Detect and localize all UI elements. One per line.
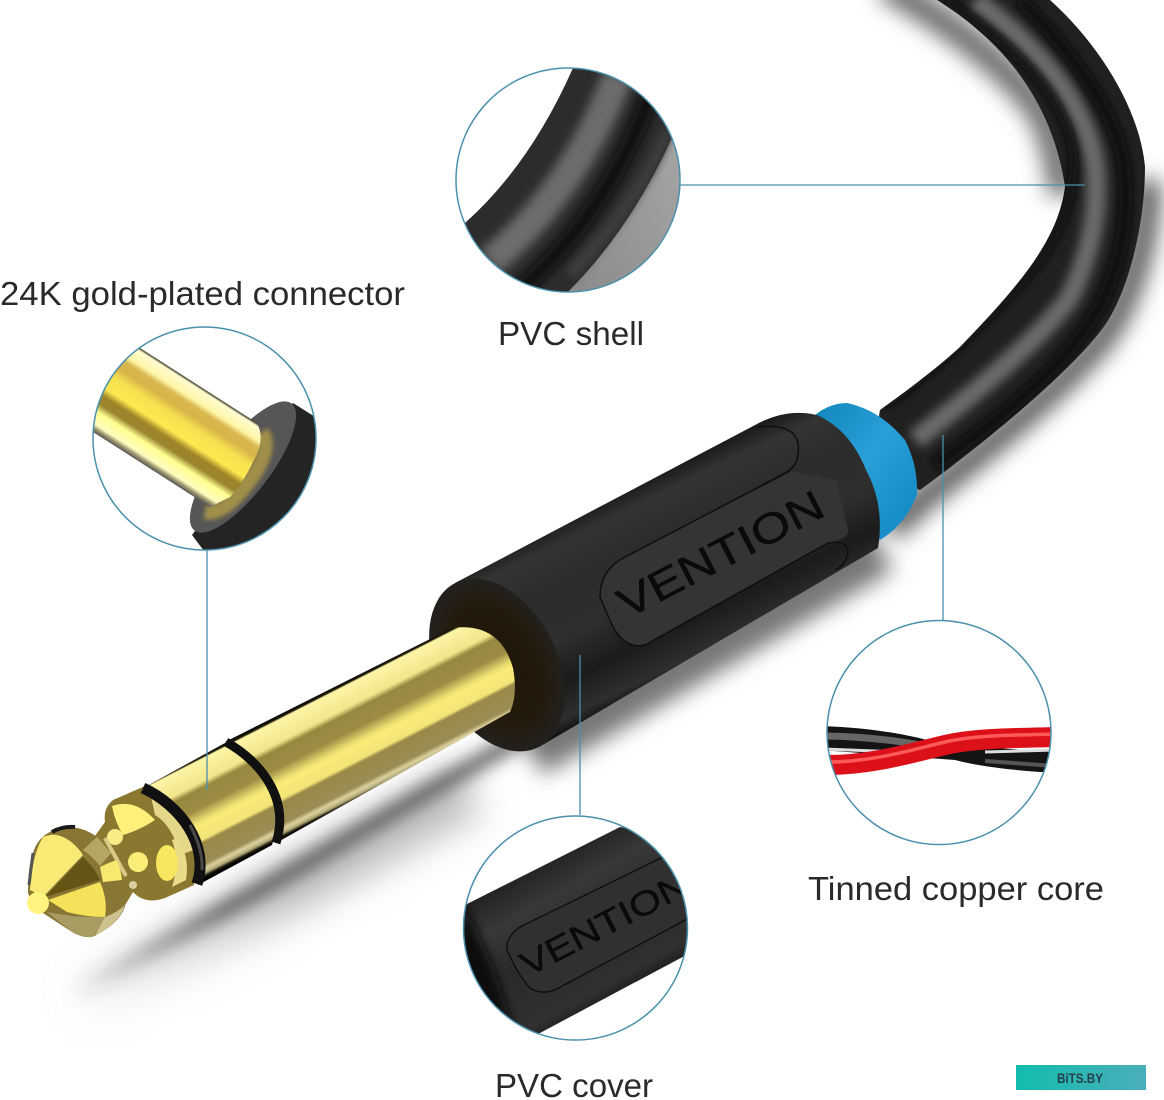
logo text: VENTION [609,481,832,627]
label: Tinned copper core: Tinned copper core [808,870,1104,907]
gold neck and ball [92,786,196,910]
upper recessed panel [625,426,798,558]
circle: tinned copper wires detail [820,620,1060,844]
circle: PVC shell detail [455,67,681,293]
blue collar [815,403,917,540]
connector body [402,413,880,774]
circle: PVC cover detail: VENTION [514,865,695,984]
gold plug sleeve [225,627,515,843]
black cable [870,0,1145,490]
logo panel outline [600,471,848,646]
gold plug middle segment [145,743,276,885]
label: PVC shell: PVC shell [498,315,644,352]
black insulating rings [143,742,280,884]
logo panel [600,471,848,646]
watermark badge: BiTS.BY [1057,1070,1104,1086]
leader lines [207,185,1085,815]
circle: gold connector detail [80,327,320,555]
front face of the body [402,556,592,774]
gold tip [27,827,125,937]
circle: PVC cover detail [450,816,700,1040]
watermark badge [1016,1065,1146,1090]
label: 24K gold-plated connector: 24K gold-plated connector [0,275,405,312]
